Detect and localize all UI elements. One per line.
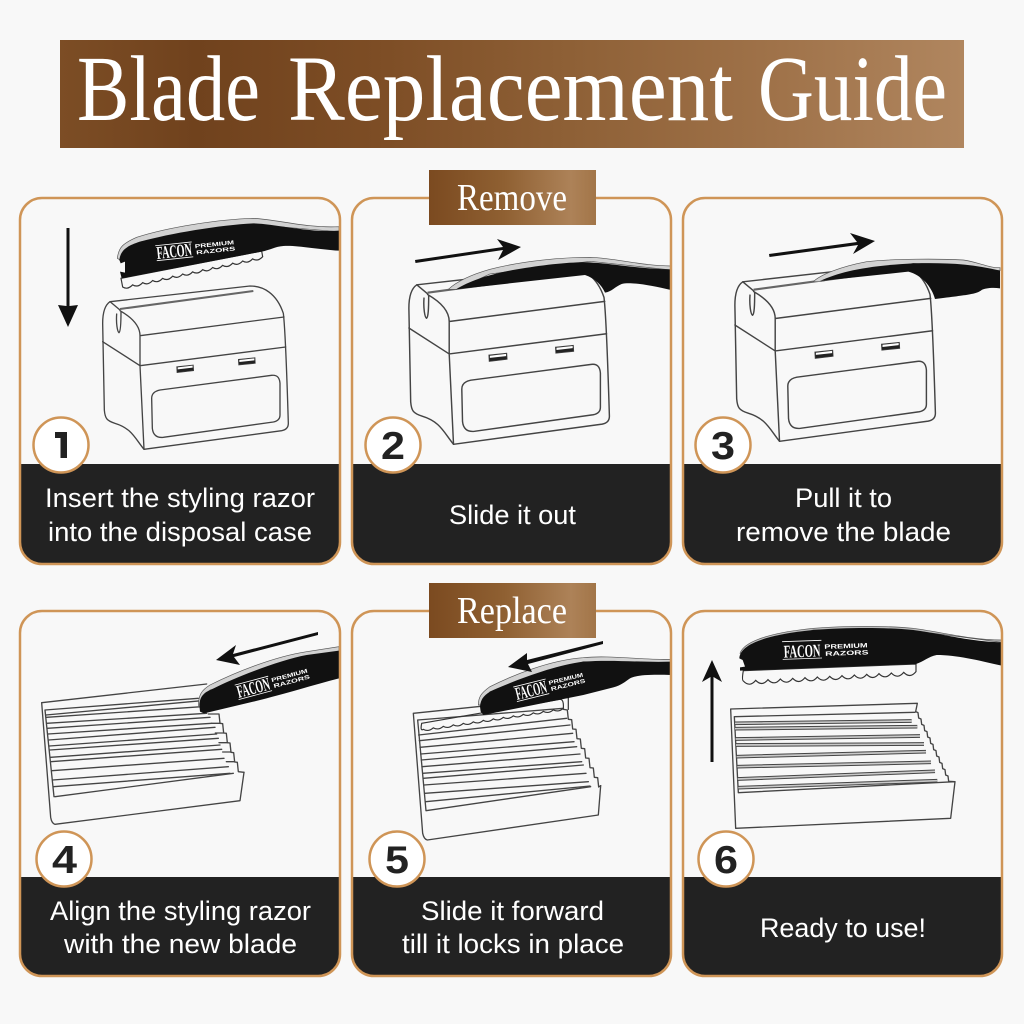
caption step 4: with the new blade bbox=[63, 929, 297, 959]
panel: step 6 bbox=[683, 611, 1002, 976]
step number 4: 4 bbox=[52, 839, 77, 882]
arrow: left bbox=[216, 632, 318, 665]
arrow: down bbox=[58, 228, 78, 327]
icon: blade tray bbox=[413, 697, 601, 840]
icon: razor with new blade bbox=[739, 626, 1002, 684]
icon: razor above case: FACON bbox=[156, 239, 193, 263]
arrow: left bbox=[508, 641, 603, 672]
panel: step 3 bbox=[683, 198, 1002, 564]
step number 3: 3 bbox=[711, 425, 735, 468]
icon: razor above case: PREMIUM bbox=[195, 240, 235, 250]
title banner: Blade bbox=[77, 38, 260, 141]
icon: blade sliding on razor: FACON bbox=[513, 677, 549, 704]
step number 1 bbox=[34, 418, 88, 472]
caption step 5 bbox=[402, 896, 624, 959]
caption step 2: Slide it out bbox=[449, 500, 577, 530]
icon: razor above case bbox=[117, 218, 339, 288]
caption step 3: Pull it to bbox=[795, 483, 892, 513]
caption step 1: Insert the styling razor bbox=[45, 483, 315, 513]
icon: razor aligned with tray: RAZORS bbox=[273, 674, 311, 690]
icon: disposal case bbox=[409, 268, 609, 444]
caption step 6: Ready to use! bbox=[760, 913, 926, 943]
step number 6: 6 bbox=[714, 839, 738, 882]
heading: Remove bbox=[429, 170, 596, 225]
caption step 4: Align the styling razor bbox=[50, 896, 311, 926]
caption step 3: remove the blade bbox=[736, 517, 951, 547]
panel: step 1 bbox=[20, 198, 340, 564]
caption step 3 bbox=[736, 483, 951, 547]
title banner: Replacement bbox=[288, 38, 733, 141]
step number 1: 1 bbox=[50, 424, 72, 467]
step number 3 bbox=[696, 418, 750, 472]
icon: razor aligned with tray: PREMIUM bbox=[271, 668, 309, 684]
caption step 1 bbox=[45, 483, 315, 547]
arrow: right bbox=[769, 233, 875, 257]
step number 5 bbox=[370, 832, 424, 886]
icon: disposal case bbox=[735, 265, 935, 441]
icon: empty tray bbox=[731, 703, 955, 828]
icon: razor sliding out bbox=[448, 257, 671, 293]
icon: razor with new blade: RAZORS bbox=[825, 649, 869, 658]
title banner bbox=[60, 38, 964, 148]
icon: blade sliding on razor: PREMIUM bbox=[548, 672, 584, 687]
title banner: Guide bbox=[758, 38, 947, 141]
step number 5: 5 bbox=[385, 839, 409, 882]
step number 6 bbox=[698, 832, 754, 886]
caption step 5: Slide it forward bbox=[421, 896, 604, 926]
panel: step 2 bbox=[352, 198, 671, 564]
caption step 5: till it locks in place bbox=[402, 929, 624, 959]
icon: razor with new blade: PREMIUM bbox=[824, 642, 868, 651]
panel: step 5 bbox=[352, 611, 671, 976]
heading: Replace: Replace bbox=[457, 590, 567, 632]
icon: blade sliding on razor bbox=[421, 657, 671, 730]
heading: Remove: Remove bbox=[457, 177, 567, 219]
icon: razor above case: RAZORS bbox=[196, 246, 236, 256]
icon: razor pulled away bbox=[813, 259, 1000, 299]
icon: razor aligned with tray: FACON bbox=[235, 674, 272, 702]
icon: blade sliding on razor: RAZORS bbox=[550, 678, 586, 693]
icon: razor with new blade: FACON bbox=[783, 640, 821, 662]
icon: disposal case bbox=[103, 286, 288, 449]
arrow: right bbox=[415, 239, 521, 263]
heading: Replace bbox=[429, 583, 596, 638]
step number 2 bbox=[366, 418, 420, 472]
icon: razor aligned with tray bbox=[198, 647, 339, 713]
icon: blade tray bbox=[42, 684, 244, 824]
step number 2: 2 bbox=[381, 425, 405, 468]
arrow: up bbox=[702, 660, 722, 762]
caption step 1: into the disposal case bbox=[48, 517, 312, 547]
panel: step 4 bbox=[20, 611, 340, 976]
caption step 4 bbox=[50, 896, 311, 959]
step number 4 bbox=[36, 832, 92, 886]
